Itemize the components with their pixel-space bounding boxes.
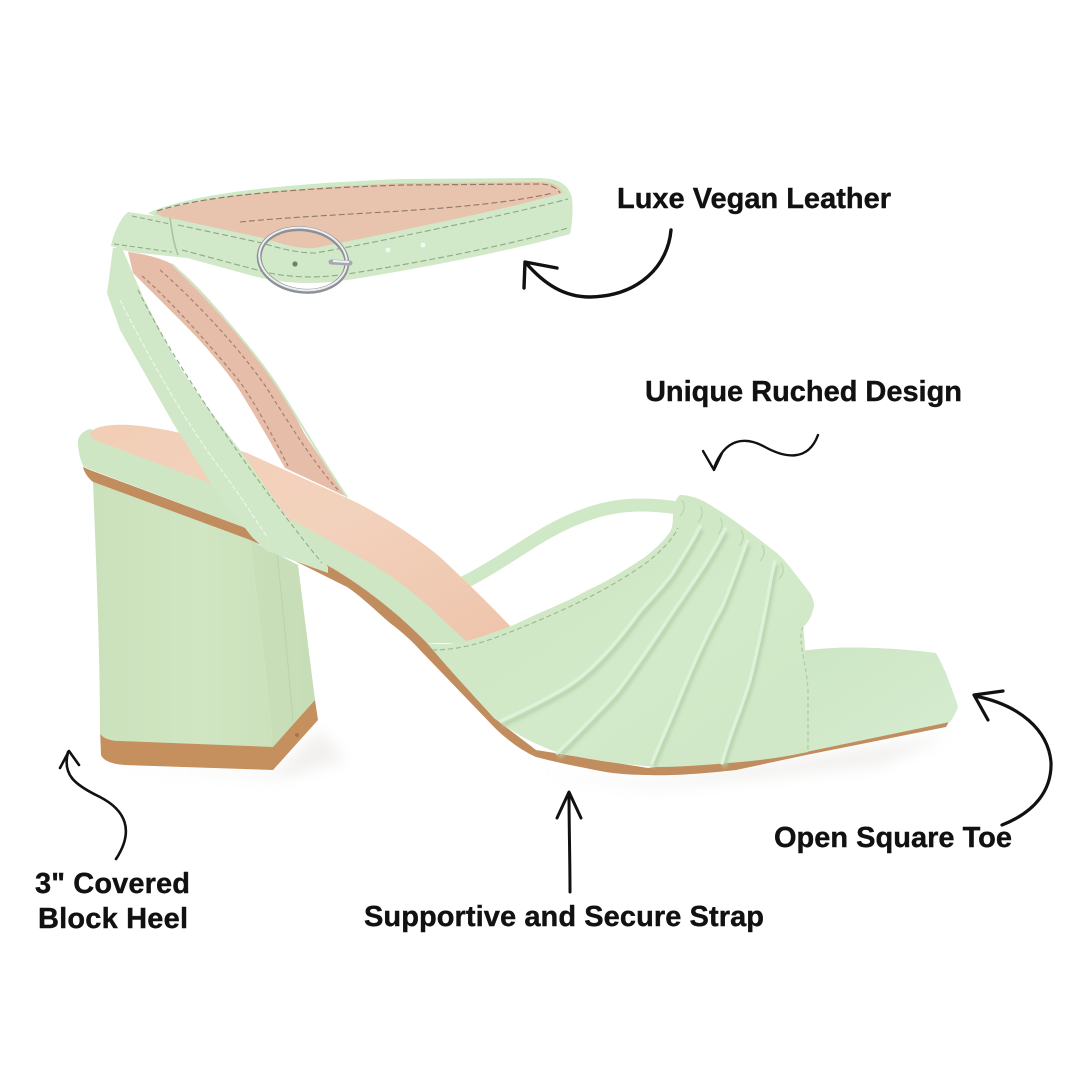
crossing green strap: [107, 248, 328, 573]
arrow: open square toe: [974, 691, 1051, 825]
label: unique ruched design: Unique Ruched Design: [645, 376, 962, 408]
strap holes: [386, 248, 390, 252]
ruching pleats highlight: [501, 526, 775, 763]
ruching pleats shadow: [503, 530, 777, 767]
sandal illustration: [78, 178, 958, 775]
arrow: supportive strap: [557, 792, 581, 892]
label: covered block heel: 3" Covered: [35, 868, 190, 900]
insole: [90, 425, 512, 645]
arrow: luxe vegan leather: [524, 230, 671, 297]
label: open square toe: Open Square Toe: [774, 822, 1012, 854]
label: covered block heel: [35, 868, 190, 935]
arrow: block heel: [60, 751, 126, 859]
label: luxe vegan leather: Luxe Vegan Leather: [617, 183, 891, 215]
vamp top stitched edge: [432, 528, 678, 650]
block heel front face: [93, 482, 273, 747]
tan sole layer: [83, 467, 950, 775]
thin toe loop strap: [465, 505, 678, 582]
arrow: unique ruched design: [703, 435, 818, 470]
label: supportive and secure strap: Supportive and Secure Strap: [364, 901, 764, 933]
back pink strap: [128, 252, 347, 497]
footbed green rim: [78, 429, 470, 643]
ankle strap rim and lining: [148, 178, 572, 250]
block heel side face: [250, 540, 315, 747]
vamp ruched upper: [427, 495, 814, 767]
heel tan sole: [100, 700, 318, 770]
shoe shadow: [115, 730, 950, 788]
buckle: [255, 222, 351, 297]
ankle strap outer band: [111, 193, 573, 283]
toe footbed: [800, 647, 958, 752]
ruching top knots: [680, 500, 808, 750]
label: covered block heel: Block Heel: [38, 903, 188, 935]
